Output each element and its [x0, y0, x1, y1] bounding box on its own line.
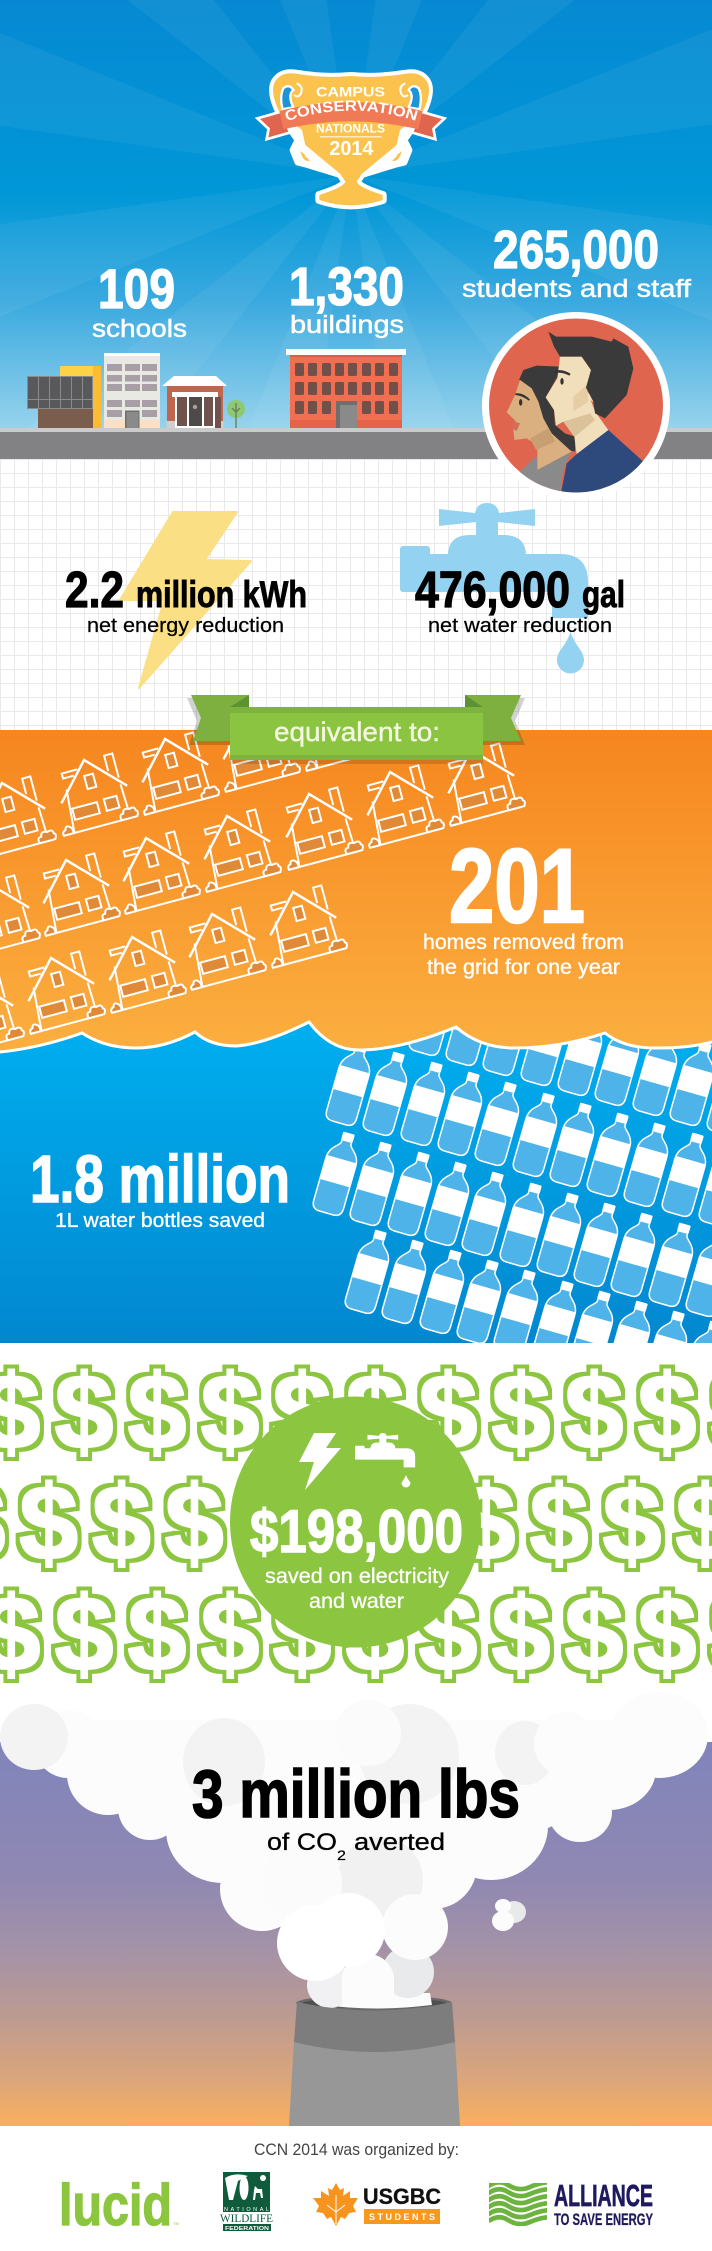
stat: water bottles: 1L water bottles saved — [55, 1210, 265, 1232]
bottles pattern — [312, 1028, 712, 1343]
icon: small faucet — [355, 1433, 415, 1488]
dollar sign pattern: $ — [165, 1464, 224, 1582]
banner: equivalent to — [187, 695, 525, 764]
dollar sign pattern: $ — [530, 1464, 588, 1582]
panel: graph paper net reductions — [0, 459, 712, 731]
logo: alliance to save energy: TO SAVE ENERGY — [554, 2210, 653, 2229]
icon: water faucet — [400, 503, 588, 674]
dollar sign pattern: $ — [201, 1575, 259, 1693]
stat: homes: 201 — [449, 828, 585, 945]
panel: homes removed from grid — [0, 730, 712, 1054]
logo: alliance to save energy: ALLIANCE — [554, 2178, 653, 2213]
dollar sign pattern: $ — [273, 1353, 331, 1471]
panel: sky header — [0, 0, 712, 428]
illustration: students portrait — [482, 312, 670, 500]
stat: schools: 109 — [98, 257, 175, 320]
stat: water reduction: net water reduction — [428, 615, 612, 637]
logo text: nationals: NATIONALS — [316, 122, 385, 136]
stat: energy reduction: million kWh — [136, 574, 307, 615]
dollar sign pattern: $ — [92, 1464, 151, 1582]
logo: national wildlife federation — [220, 2172, 273, 2232]
stat: CO2 — [192, 1756, 520, 1863]
stat: energy reduction: 2.2 — [65, 561, 124, 618]
stat: CO2: averted — [354, 1829, 445, 1856]
logo: national wildlife federation: WILDLIFE — [220, 2211, 273, 2225]
dollar sign pattern: $ — [55, 1575, 113, 1693]
icon: glass building — [27, 366, 101, 428]
icon: red brick building — [286, 349, 406, 428]
stat: schools: schools — [92, 315, 187, 343]
stat: schools — [92, 257, 187, 343]
icon: trophy logo — [254, 69, 448, 210]
stat: students and staff: students and staff — [462, 275, 691, 303]
logo text: conservation: CONSERVATION — [286, 100, 418, 120]
icon: brick hall — [162, 376, 227, 428]
panel: water bottles saved — [0, 1024, 712, 1343]
stat: buildings: buildings — [290, 311, 404, 339]
stat: buildings: 1,330 — [289, 257, 404, 317]
logo: lucid: lucid — [59, 2173, 172, 2238]
panel: organizers footer — [62, 2143, 653, 2231]
icon: small bolt — [299, 1433, 341, 1490]
stat: energy reduction: net energy reduction — [87, 615, 284, 637]
illustration: smoke cloud — [0, 1690, 712, 2008]
dollar sign pattern — [0, 1353, 712, 1693]
logo: usgbc students: STUDENTS — [369, 2212, 435, 2222]
dollar sign pattern: $ — [457, 1464, 515, 1582]
logo: national wildlife federation: NATIONAL — [224, 2207, 269, 2213]
stat: water reduction: gal — [582, 574, 625, 615]
dollar sign pattern: $ — [492, 1575, 550, 1693]
stat: homes: the grid for one year — [427, 956, 620, 979]
dollar sign pattern: $ — [419, 1353, 477, 1471]
savings caption — [265, 1565, 450, 1613]
stat: water reduction — [415, 561, 625, 637]
logo: usgbc students — [313, 2183, 441, 2226]
stat: water bottles — [30, 1142, 290, 1232]
dollar sign pattern: $ — [273, 1575, 331, 1693]
illustration: smokestack — [289, 1995, 460, 2126]
stat: homes: homes removed from — [423, 931, 624, 954]
dollar sign pattern: $ — [128, 1353, 186, 1471]
houses pattern — [0, 685, 526, 1056]
dollar sign pattern: $ — [19, 1464, 78, 1582]
icon: tree — [227, 400, 245, 428]
dollar sign pattern: $ — [565, 1353, 623, 1471]
stat: students and staff: 265,000 — [493, 220, 659, 280]
dollar sign pattern: $ — [565, 1575, 623, 1693]
stat: CO2: 2 — [337, 1847, 346, 1863]
banner label: equivalent to: — [274, 717, 440, 747]
savings caption: saved on electricity — [265, 1565, 450, 1588]
logo text: year: 2014 — [329, 138, 373, 160]
stat: dollars: $198,000 — [250, 1498, 463, 1565]
dollar sign pattern: $ — [603, 1464, 661, 1582]
dollar sign pattern: $ — [55, 1353, 113, 1471]
stat: CO2: 3 million lbs — [192, 1756, 520, 1832]
footer heading: CCN 2014 was organized by: — [254, 2140, 459, 2159]
logo: national wildlife federation: FEDERATION — [225, 2226, 269, 2232]
dollar sign pattern: $ — [419, 1575, 477, 1693]
dollar sign pattern: $ — [346, 1353, 404, 1471]
logo: lucid: TM — [173, 2221, 179, 2226]
dollar sign pattern: $ — [201, 1353, 259, 1471]
dollar sign pattern: $ — [128, 1575, 186, 1693]
stat: water bottles: 1.8 million — [30, 1142, 290, 1217]
stat: energy reduction — [65, 561, 307, 637]
stat: CO2: of CO — [267, 1829, 337, 1856]
road — [0, 428, 712, 459]
stat: students and staff — [462, 220, 691, 303]
smokestack collar — [294, 2002, 455, 2052]
savings circle — [230, 1396, 481, 1648]
dollar sign pattern: $ — [492, 1353, 550, 1471]
icon: white office building — [104, 353, 160, 428]
logo: usgbc students: USGBC — [363, 2184, 441, 2209]
stat: buildings — [289, 257, 404, 339]
dollar sign pattern: $ — [638, 1575, 696, 1693]
icon: lightning bolt — [120, 512, 251, 688]
dollar sign pattern: $ — [346, 1575, 404, 1693]
savings caption: and water — [309, 1590, 404, 1613]
panel: CO2 averted — [0, 1690, 712, 2126]
logo text: campus: CAMPUS — [316, 84, 385, 100]
panel: dollars saved — [0, 1353, 712, 1693]
stat: homes — [423, 828, 624, 979]
logo: alliance to save energy — [489, 2183, 653, 2226]
stat: water reduction: 476,000 — [415, 561, 570, 618]
dollar sign pattern: $ — [638, 1353, 696, 1471]
